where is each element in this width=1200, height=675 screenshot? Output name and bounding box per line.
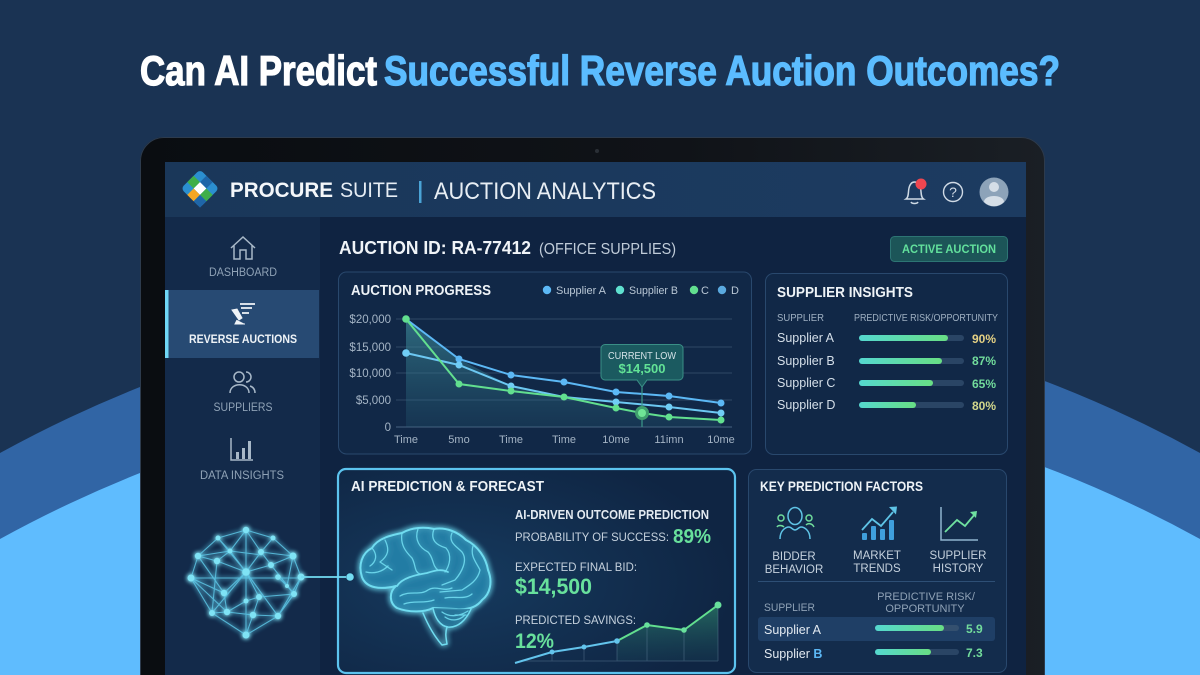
line chart: Time [394,434,418,446]
score values [972,332,996,413]
title: Successful Reverse Auction Outcomes? [384,47,1060,94]
supplier rows: Supplier D [777,398,835,412]
panel heading: KEY PREDICTION FACTORS [760,478,923,494]
factor labels: MARKET [853,550,901,562]
row: supplier a: Supplier A [764,623,822,637]
score values: 87% [972,354,996,368]
auction id heading [339,238,676,258]
score values: 80% [972,399,996,413]
connector line [301,573,354,581]
title: Can AI Predict [140,47,377,94]
chart legend: C [701,285,709,297]
chart legend: Supplier B [629,285,678,297]
forecast sparkline [515,602,722,663]
prediction stats: EXPECTED FINAL BID: [515,560,637,574]
prediction stats: PROBABILITY OF SUCCESS: [515,530,669,544]
table header [764,591,976,615]
nav: data insights: DATA INSIGHTS [200,470,284,482]
nav: suppliers: SUPPLIERS [214,402,273,414]
neural network graphic [188,527,304,638]
status badge [890,236,1008,262]
supplier rows [777,331,835,412]
prediction stats: $14,500 [515,574,592,599]
auction id heading: (OFFICE SUPPLIES) [539,241,676,258]
dashboard screen [165,162,1026,675]
line chart: 11imn [654,434,684,446]
factor labels: BEHAVIOR [765,564,823,576]
panel: ai prediction and forecast [301,469,735,673]
nav: reverse auctions active: REVERSE AUCTIONS [189,332,297,346]
factor labels: TRENDS [853,563,901,575]
line chart: 10me [707,434,735,446]
line chart: 5mo [448,434,470,446]
icon: logo [181,169,219,208]
factor labels: SUPPLIER [930,550,986,562]
icon: supplier history [941,507,978,540]
nav: reverse auctions active [165,290,319,358]
header bar [165,162,1026,217]
icon: market trends [862,506,897,540]
chart legend: Supplier A [556,285,607,297]
prediction stats: PREDICTED SAVINGS: [515,613,636,627]
panel: auction progress [338,272,752,454]
line chart: $5,000 [356,395,391,407]
table header: PREDICTIVE RISK/OPPORTUNITY [854,312,998,324]
panel: supplier insights [766,274,1008,454]
panel heading: AI PREDICTION & FORECAST [351,479,544,495]
icon: notification bell [906,178,926,204]
score values: 65% [972,377,996,391]
prediction stats: AI-DRIVEN OUTCOME PREDICTION [515,508,709,522]
line chart: $15,000 [349,342,391,354]
line chart [349,314,735,446]
nav: data insights [200,438,284,482]
icon: avatar [980,178,1008,206]
score bars [859,335,964,408]
row: supplier b [764,646,983,661]
callout: current low: CURRENT LOW [608,350,676,362]
factor labels [765,550,986,576]
panel: key prediction factors [748,470,1006,672]
title [140,47,1060,94]
line chart: 0 [385,422,391,434]
factor labels: HISTORY [933,563,984,575]
table header: PREDICTIVE RISK/ [877,591,976,603]
line chart: Time [552,434,576,446]
panel heading: AUCTION PROGRESS [351,283,491,299]
table header [777,312,998,324]
callout: current low [601,344,683,387]
brand name: PROCURE [230,179,333,202]
icon: help [944,182,962,202]
factor labels: BIDDER [772,551,816,563]
icon: bidder behavior [777,508,814,539]
line chart: $10,000 [349,368,391,380]
nav: dashboard: DASHBOARD [209,267,277,279]
row: supplier a: 5.9 [966,622,983,636]
row: supplier a [758,617,995,641]
header title: AUCTION ANALYTICS [434,178,656,205]
table header: OPPORTUNITY [885,603,965,615]
nav: dashboard [209,237,277,279]
prediction stats: 12% [515,630,554,653]
laptop frame [140,137,1045,675]
auction id heading: AUCTION ID: RA-77412 [339,238,531,258]
row: supplier b: Supplier B [764,647,822,661]
table header: SUPPLIER [777,312,824,324]
score values: 90% [972,332,996,346]
chart legend [543,285,739,297]
icon: help: ? [949,184,957,200]
supplier rows: Supplier B [777,354,835,368]
row: supplier b: 7.3 [966,646,983,660]
status badge: ACTIVE AUCTION [902,242,996,256]
panel heading: SUPPLIER INSIGHTS [777,285,913,301]
chart legend: D [731,285,739,297]
supplier rows: Supplier A [777,331,835,345]
supplier rows: Supplier C [777,376,835,390]
nav: suppliers [214,372,273,414]
callout: current low: $14,500 [618,361,666,376]
prediction stats [515,508,711,653]
line chart: 10me [602,434,630,446]
line chart: Time [499,434,523,446]
line chart: $20,000 [349,314,391,326]
prediction stats: 89% [673,526,711,548]
sidebar [165,217,320,675]
header bar: SUITE [340,179,398,202]
table header: SUPPLIER [764,602,815,614]
icon: glowing brain [360,528,490,645]
